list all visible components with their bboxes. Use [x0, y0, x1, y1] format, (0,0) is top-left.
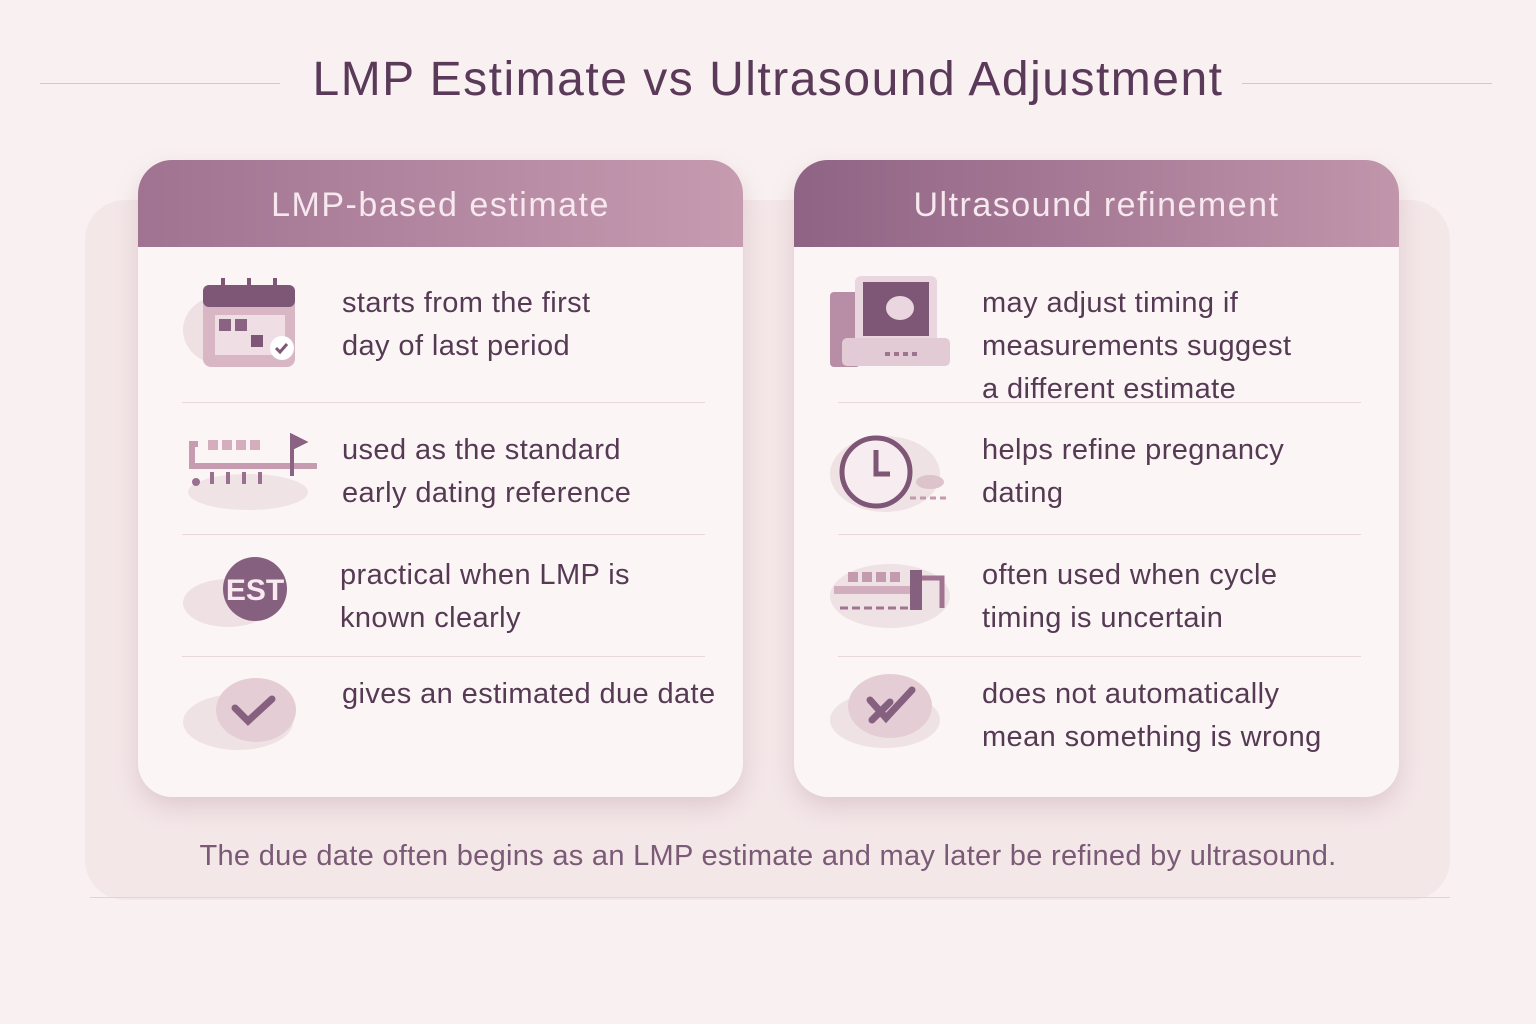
text row 1: may adjust timing if: [982, 287, 1238, 319]
text row 1: a different estimate: [982, 373, 1236, 405]
text row 3: often used when cycle: [982, 559, 1277, 591]
panel: Ultrasound refinement: [794, 160, 1399, 797]
text row 2: [982, 434, 1284, 509]
text row 4: gives an estimated due date: [342, 678, 716, 710]
text row 3: [340, 559, 630, 634]
icon: timeline uncertain: [830, 564, 950, 628]
heading: Ultrasound refinement: [794, 160, 1399, 247]
footer note: The due date often begins as an LMP estimate and may later be refined by ultrasound.: [199, 840, 1337, 872]
title: LMP Estimate vs Ultrasound Adjustment: [312, 53, 1224, 106]
icon: check: [183, 678, 296, 750]
text row 2: helps refine pregnancy: [982, 434, 1284, 466]
text row 4: [982, 678, 1322, 753]
panel: LMP-based estimate: [138, 160, 743, 797]
text row 4: mean something is wrong: [982, 721, 1322, 753]
text row 2: used as the standard: [342, 434, 621, 466]
text row 2: dating: [982, 477, 1063, 509]
text row 2: early dating reference: [342, 477, 631, 509]
heading: Ultrasound refinement: Ultrasound refinement: [913, 186, 1280, 224]
text row 3: timing is uncertain: [982, 602, 1223, 634]
icon: calendar: [183, 278, 295, 367]
heading: LMP-based estimate: [138, 160, 743, 247]
text row 1: [982, 287, 1291, 405]
text row 3: known clearly: [340, 602, 521, 634]
icon: ultrasound machine: [830, 276, 950, 367]
text row 3: practical when LMP is: [340, 559, 630, 591]
text row 4: does not automatically: [982, 678, 1279, 710]
heading: LMP-based estimate: LMP-based estimate: [271, 186, 610, 224]
icon: EST badge: EST: [226, 574, 284, 607]
background panel: [85, 200, 1450, 900]
icon: clock: [830, 436, 946, 512]
icon: timeline flag: [188, 432, 317, 510]
text row 2: [342, 434, 631, 509]
text row 1: day of last period: [342, 330, 570, 362]
icon: check/cross: [830, 674, 940, 748]
text row 1: [342, 287, 590, 362]
text row 3: [982, 559, 1277, 634]
icon: EST badge: [183, 557, 287, 627]
text row 1: starts from the first: [342, 287, 590, 319]
text row 1: measurements suggest: [982, 330, 1291, 362]
